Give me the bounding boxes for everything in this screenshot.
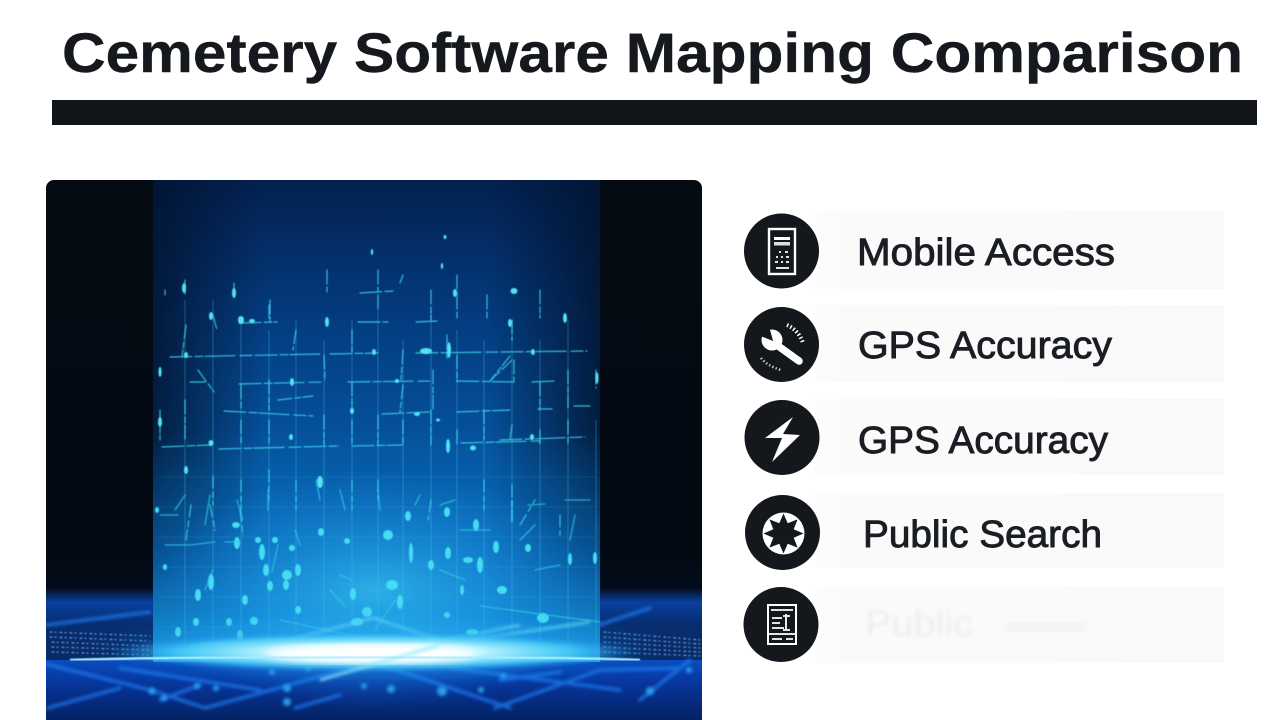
panel: feature list [744, 211, 1224, 663]
row: GPS Accuracy [744, 305, 1224, 382]
row: GPS Accuracy [744, 399, 1224, 475]
horizon flare [69, 616, 641, 684]
hologram lower edge glow lines [300, 616, 592, 638]
label: Public Search [863, 514, 1102, 556]
map data strokes lower [160, 480, 600, 640]
icon: wrench [758, 325, 803, 370]
row: Public (faded) [744, 587, 1224, 663]
floor: network lines [46, 608, 690, 708]
icon: document chart [768, 605, 796, 644]
icon: compass star [762, 512, 804, 554]
icon: mobile phone [769, 229, 795, 274]
row: Mobile Access [744, 211, 1224, 289]
floor: light speckles at horizon [50, 632, 700, 656]
map grid bright fragments [160, 270, 596, 540]
icon: lightning bolt [765, 417, 800, 462]
label: GPS Accuracy [858, 325, 1112, 367]
title underline bar [52, 100, 1257, 125]
hologram panel [150, 180, 600, 710]
map grid faint lines [158, 300, 596, 660]
title: Cemetery Software Mapping Comparison [62, 21, 1243, 84]
label (faded): Public [865, 603, 973, 644]
floor: horizon glow band [46, 588, 702, 720]
panel: holographic map image [46, 180, 702, 720]
map data dots upper [158, 235, 598, 488]
faded label smudge [1007, 622, 1085, 632]
row: Public Search [745, 493, 1224, 570]
floor: glowing nodes [148, 665, 692, 706]
label: GPS Accuracy [858, 420, 1108, 462]
map data dots lower [155, 507, 597, 640]
label: Mobile Access [857, 232, 1115, 274]
